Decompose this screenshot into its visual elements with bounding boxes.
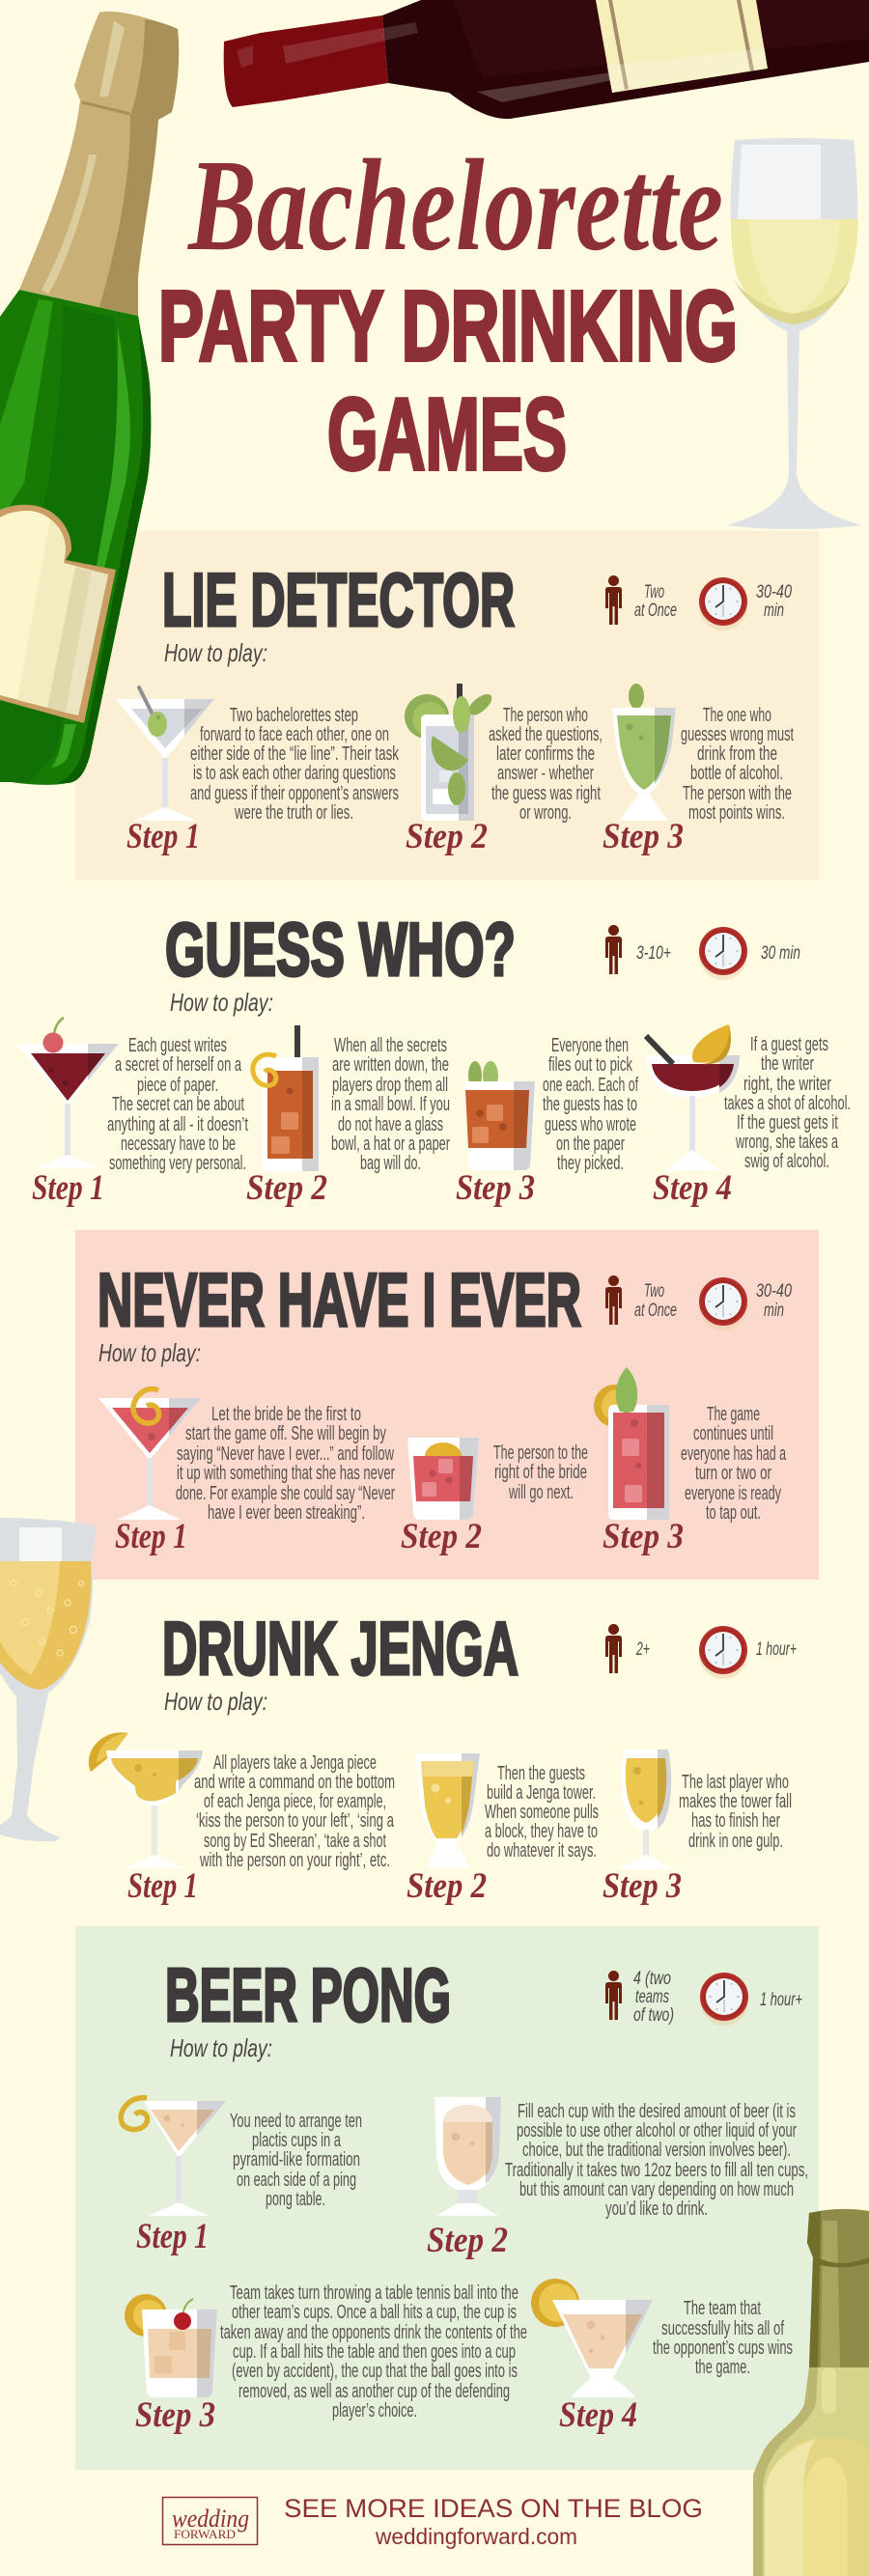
time label: 30 min [761,943,800,964]
panel: beer pong [75,1926,819,2470]
step text: it up with something that she has never [177,1463,395,1484]
step label: Step 2 [406,1866,487,1906]
step text: You need to arrange ten [230,2111,362,2132]
how to play: How to play: [170,2033,272,2062]
icon: bloody mary glass [594,1367,669,1520]
icon: flute glass [618,1750,675,1869]
illustration: green champagne bottle [0,12,179,785]
players label [634,1281,677,1321]
step label: Step 1 [126,817,200,856]
icon: bowl glass with lemon wedge [646,1024,740,1170]
step text: start the game off. She will begin by [185,1423,386,1444]
icon: green goblet [612,684,676,821]
step text: of each Jenga piece, for example, [204,1791,386,1812]
step label: Step 3 [456,1168,535,1208]
step text: guess who wrote [545,1114,636,1135]
step text: The person with the [683,783,792,804]
step text: the opponent’s cups wins [653,2338,793,2359]
illustration: left champagne glass [0,1518,97,1841]
how to play: How to play: [170,988,273,1017]
icon: clock [700,1973,748,2026]
icon: martini with olive [116,687,214,821]
icon: pilsner with beer [434,2097,501,2216]
players label: 4 (two [633,1969,671,1989]
heading: drunk jenga: DRUNK JENGA [162,1606,519,1691]
step text [724,1034,851,1172]
step text: ‘kiss the person to your left’, ‘sing a [196,1810,395,1832]
step text [543,1035,638,1174]
step text: plactis cups in a [252,2130,342,2151]
step label: Step 3 [603,1517,684,1556]
step text: piece of paper. [137,1075,218,1096]
step text: and write a command on the bottom [194,1772,395,1793]
step text [681,1404,787,1524]
step text: everyone has had a [681,1443,787,1465]
step text: player’s choice. [332,2400,417,2422]
step label: Step 2 [246,1168,327,1208]
step text: The person who [503,705,588,726]
step text [190,705,400,824]
step label: Step 2 [427,2221,508,2260]
step text [220,2282,527,2422]
how to play: How to play: [98,1338,201,1367]
step label: Step 4 [559,2395,637,2435]
step text: are written down, the [332,1054,449,1076]
panel: never have i ever [75,1230,819,1580]
players label: 2+ [635,1639,650,1660]
step text: answer - whether [497,763,594,784]
time label: 1 hour+ [760,1990,802,2010]
footer: logo: FORWARD [174,2527,236,2541]
step text: something very personal. [109,1153,246,1174]
step label: Step 4 [653,1168,732,1208]
illustration: red wine bottle [224,0,869,119]
step text: The secret can be about [112,1094,244,1115]
icon: orange tall glass [253,1025,319,1171]
footer: call to action: SEE MORE IDEAS ON THE BLOG [284,2494,703,2523]
time label: 30-40 [756,1281,792,1302]
step text: (even by accident), the cup that the ball goes into is [232,2361,518,2382]
step text: continues until [693,1423,773,1444]
step text [679,1772,792,1852]
step text: you’d like to drink. [605,2198,708,2220]
step text [194,1752,395,1871]
step label: Step 1 [32,1168,104,1208]
step text: Each guest writes [128,1035,227,1056]
footer: logo [162,2497,257,2545]
step text: files out to pick [548,1054,633,1076]
step text: removed, as well as another cup of the defending [238,2381,510,2402]
step text: most points wins. [688,802,785,824]
step text: do not have a glass [338,1114,443,1135]
icon: clock [699,1277,747,1330]
title: GAMES [327,378,567,491]
step label: Step 1 [115,1517,187,1556]
step text: or wrong. [519,802,572,824]
time label: 30-40 [756,582,792,602]
step text [230,2111,362,2210]
step text: have I ever been streaking”. [208,1502,365,1524]
icon: person [605,1624,622,1673]
step text: were the truth or lies. [234,802,353,824]
icon: margarita glass [89,1732,203,1868]
panel: drunk jenga [89,1606,797,1906]
icon: person [605,1275,622,1325]
step text: on the paper [556,1134,625,1155]
step label: Step 3 [603,1866,682,1906]
step text: asked the questions, [489,724,603,745]
step text: drink in one gulp. [688,1831,783,1852]
step text: a block, they have to [485,1821,598,1842]
players label: at Once [634,1301,677,1321]
icon: red martini with cherry [16,1018,119,1168]
step text: right of the bride [494,1462,587,1483]
step text: either side of the “lie line”. Their task [190,743,400,765]
step text: When someone pulls [485,1802,599,1823]
step text: drink from the [697,743,777,765]
panel: guess who [16,907,851,1208]
step text: the game. [695,2357,750,2378]
step label: Step 3 [135,2395,215,2435]
step text: with the person on your right’, etc. [199,1850,390,1871]
icon: person [605,575,622,625]
step text: done. For example she could say “Never [176,1483,395,1504]
step text: All players take a Jenga piece [213,1752,377,1774]
step text: bottle of alcohol. [690,763,783,784]
step text: The team that [684,2298,761,2319]
step text: The person to the [493,1442,588,1464]
icon: person [605,925,622,974]
step text: and guess if their opponent’s answers [190,783,399,804]
heading: never have i ever: NEVER HAVE I EVER [98,1257,581,1342]
step text: has to finish her [691,1810,780,1832]
step text [493,1442,588,1503]
step text: turn or two or [695,1463,771,1484]
step text: Let the bride be the first to [211,1404,361,1425]
step text: anything at all - it doesn’t [107,1114,248,1135]
heading: guess who: GUESS WHO? [165,907,516,992]
step label: Step 3 [603,817,684,856]
step text: The last player who [682,1772,789,1793]
step text: necessary have to be [121,1134,236,1155]
time label [756,1281,792,1321]
time label: min [764,601,784,621]
step text [681,705,794,824]
step text [489,705,603,824]
step text [505,2101,808,2220]
time label: min [764,1301,784,1321]
step text: Then the guests [497,1763,585,1784]
icon: orange short glass [464,1061,535,1170]
icon: mojito glass [405,684,495,821]
panel: lie detector [75,531,819,881]
how to play: How to play: [164,638,267,667]
step text: song by Ed Sheeran’, ‘take a shot [204,1831,386,1852]
step text: makes the tower fall [679,1791,792,1812]
step text: the guests has to [543,1094,637,1115]
step text: to tap out. [706,1502,761,1524]
title: Bachelorette [186,133,723,278]
heading: lie detector: LIE DETECTOR [162,557,515,642]
step text [331,1035,450,1174]
step label: Step 2 [406,817,488,856]
step text: bag will do. [360,1153,421,1174]
step text: build a Jenga tower. [487,1782,596,1804]
players label [634,582,677,621]
icon: pilsner glass [415,1753,480,1868]
step text: Everyone then [551,1035,629,1056]
step text: forward to face each other, one on [200,724,389,745]
icon: coupe glass with lemon [531,2279,653,2397]
step text: The one who [703,705,771,726]
players label: 3-10+ [636,943,671,964]
step text: When all the secrets [334,1035,447,1056]
step text: If a guest gets [750,1034,828,1055]
illustration: top champagne glass [726,138,862,529]
icon: clock [699,577,747,630]
players label: at Once [634,601,677,621]
players label: Two [644,1281,664,1302]
step text: right, the writer [743,1074,831,1095]
illustration: white wine bottle [753,2209,869,2576]
step text: successfully hits all of [661,2318,784,2339]
step text: is to ask each other daring questions [193,763,396,784]
step text: players drop them all [332,1075,448,1096]
icon: martini with curl [121,2098,226,2216]
step text [653,2298,793,2378]
footer: logo: wedding [172,2505,249,2533]
step text: one each. Each of [543,1075,638,1096]
step text: taken away and the opponents drink the contents of the [220,2322,527,2343]
step label: Step 1 [127,1866,198,1906]
step label: Step 2 [401,1517,482,1556]
time label [756,582,792,621]
step text [176,1404,395,1524]
step text: a secret of herself on a [115,1054,242,1076]
step text: will go next. [508,1482,574,1503]
step text: the guess was right [491,783,601,804]
players label: teams [635,1987,669,2007]
step text: cup. If a ball hits the table and then goes into a cup [233,2341,516,2363]
step text: in a small bowl. If you [331,1094,450,1115]
step text: later confirms the [496,743,595,765]
step text: The game [707,1404,760,1425]
footer: website: weddingforward.com [375,2524,577,2549]
step text: do whatever it says. [487,1840,597,1862]
step text: saying “Never have I ever...” and follow [177,1443,394,1465]
step text: bowl, a hat or a paper [331,1134,450,1155]
step text: they picked. [557,1153,624,1174]
heading: beer pong: BEER PONG [165,1952,451,2037]
step text: Team takes turn throwing a table tennis ball into the [230,2282,519,2304]
step text: other team’s cups. Once a ball hits a cup, the cup is [232,2302,517,2323]
step text: on each side of a ping [237,2170,356,2191]
icon: clock [699,1626,747,1679]
players label [633,1969,674,2026]
icon: pink short glass [407,1438,479,1520]
icon: short glass with cherry [125,2294,217,2397]
players label: Two [644,582,664,602]
title [158,133,738,491]
players label: of two) [633,2005,674,2026]
step text: everyone is ready [685,1483,781,1504]
step text: pyramid-like formation [233,2149,360,2170]
step text [107,1035,248,1174]
step label: Step 1 [136,2217,209,2256]
step text: guesses wrong must [681,724,794,745]
time label: 1 hour+ [756,1639,797,1660]
step text: the writer [761,1053,814,1075]
icon: person [605,1971,622,2020]
icon: pink martini with curl [98,1389,201,1520]
step text: Two bachelorettes step [230,705,358,726]
step text: pong table. [266,2189,325,2210]
step text [485,1763,599,1862]
icon: clock [699,927,747,980]
how to play: How to play: [164,1687,267,1716]
